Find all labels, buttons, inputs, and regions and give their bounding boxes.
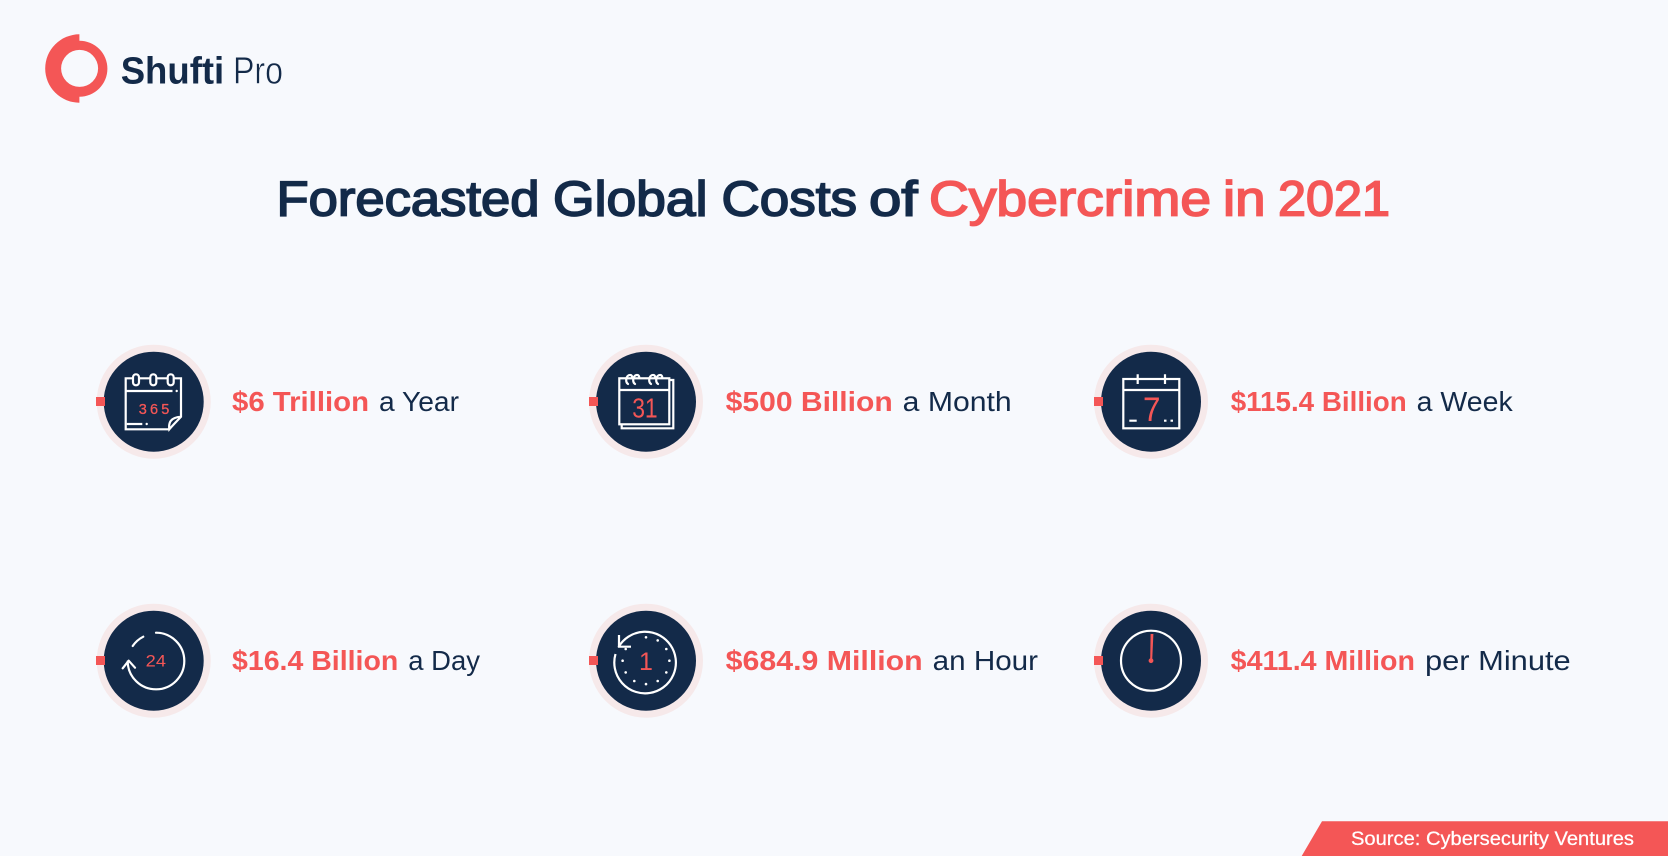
title: Forecasted <box>276 172 540 226</box>
stat text: $115.4 Billion <box>1231 386 1407 417</box>
icon: 31 calendar <box>589 345 703 459</box>
icon: 365 calendar: 365 <box>139 402 169 418</box>
panel: $411.4 Million per Minute <box>1094 604 1571 718</box>
stat text <box>726 645 1038 676</box>
title: Cybercrime <box>929 172 1211 226</box>
stat text: a Month <box>903 386 1012 417</box>
title: of <box>869 172 918 226</box>
stat text <box>232 645 480 676</box>
logo: Shufti Pro <box>45 34 283 103</box>
icon: 365 calendar <box>96 345 211 459</box>
icon: one hour clock: 1 <box>639 648 653 676</box>
source banner <box>1302 821 1668 856</box>
stat text: a Year <box>379 386 459 417</box>
panel: $6 Trillion a Year <box>96 345 459 459</box>
icon: one hour clock <box>589 604 703 718</box>
source banner: Source: Cybersecurity Ventures <box>1351 829 1634 850</box>
title: in <box>1223 172 1266 226</box>
stat text: per Minute <box>1425 645 1571 676</box>
icon: stopwatch minute <box>1094 604 1208 718</box>
logo wordmark: Shufti <box>121 50 224 92</box>
stat text: $6 Trillion <box>232 386 369 417</box>
title: 2021 <box>1278 172 1390 226</box>
stat text: a Week <box>1417 386 1514 417</box>
logo wordmark: Pro <box>233 50 283 92</box>
stat text: a Day <box>408 645 480 676</box>
icon: 24 hour cycle <box>96 604 211 718</box>
panel: $115.4 Billion a Week <box>1094 345 1514 459</box>
panel: $16.4 Billion a Day <box>96 604 480 718</box>
logo wordmark <box>121 50 283 92</box>
panel: $684.9 Million an Hour <box>589 604 1038 718</box>
stat text: an Hour <box>933 645 1038 676</box>
icon: 31 calendar: 31 <box>632 392 658 423</box>
stat text: $500 Billion <box>726 386 893 417</box>
stat text <box>726 386 1012 417</box>
stat text <box>1231 386 1514 417</box>
title <box>276 172 1390 226</box>
stat text <box>232 386 459 417</box>
stat text: $684.9 Million <box>726 645 923 676</box>
panel: $500 Billion a Month <box>589 345 1012 459</box>
title: Global <box>553 172 708 226</box>
title: Costs <box>722 172 857 226</box>
icon: 7 calendar <box>1094 345 1208 459</box>
icon: logo ring <box>45 34 107 103</box>
stat text <box>1231 645 1571 676</box>
icon: 7 calendar: 7 <box>1143 391 1160 429</box>
stat text: $411.4 Million <box>1231 645 1415 676</box>
stat text: $16.4 Billion <box>232 645 398 676</box>
icon: 24 hour cycle: 24 <box>146 652 166 671</box>
